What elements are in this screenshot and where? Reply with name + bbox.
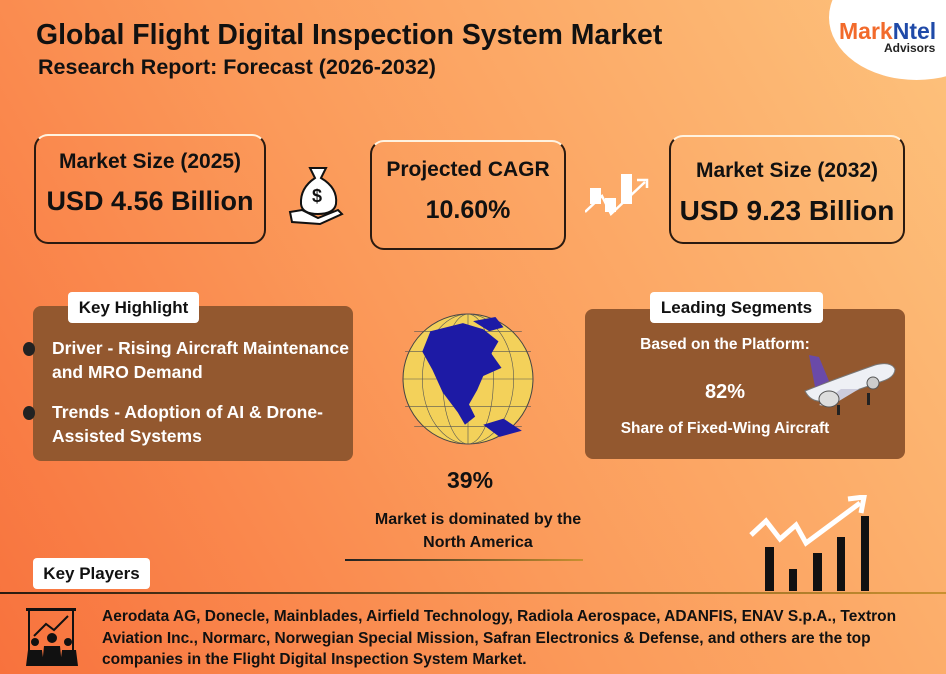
logo xyxy=(829,0,946,80)
icon: growth chart xyxy=(585,174,648,216)
logo: Advisors xyxy=(884,41,935,55)
panel: leading segments xyxy=(585,309,905,459)
box: market size 2032: USD 9.23 Billion xyxy=(680,195,894,226)
icon: bar chart arrow xyxy=(749,495,869,591)
text key players xyxy=(102,608,896,668)
bullet trends xyxy=(23,406,35,420)
label key players xyxy=(33,558,150,589)
icon: presentation people xyxy=(26,608,78,666)
panel: key highlight: Trends - Adoption of AI & Drone- xyxy=(52,402,323,422)
bullet driver xyxy=(23,342,35,356)
panel: key highlight xyxy=(33,306,353,461)
text key players: Aerodata AG, Donecle, Mainblades, Airfield Technology, Radiola Aerospace, ADANFIS, ENAV S.p.A., Textron xyxy=(102,608,896,625)
panel: key highlight: Driver - Rising Aircraft Maintenance xyxy=(52,338,349,358)
panel: leading segments: Based on the Platform: xyxy=(640,336,810,353)
subtitle: Research Report: Forecast (2026-2032) xyxy=(38,55,436,79)
box: CAGR xyxy=(370,140,566,250)
title: Global Flight Digital Inspection System Market xyxy=(36,19,662,51)
box: market size 2025: Market Size (2025) xyxy=(59,150,241,173)
text key players: Aviation Inc., Normarc, Norwegian Special Mission, Safran Electronics & Defense, and others are the top xyxy=(102,630,871,646)
box: market size 2032 xyxy=(669,135,905,244)
globe xyxy=(402,314,534,444)
text dominated xyxy=(375,511,581,551)
label key highlight xyxy=(68,292,199,323)
icon: money bag xyxy=(288,167,344,225)
logo: MarkNtel xyxy=(839,18,936,44)
stat 82%: 82% xyxy=(705,381,745,403)
box: CAGR: Projected CAGR xyxy=(386,158,550,181)
label leading segments xyxy=(650,292,823,323)
box: CAGR: 10.60% xyxy=(426,196,510,224)
panel: key highlight: and MRO Demand xyxy=(52,362,203,382)
icon: money bag: $ xyxy=(312,186,322,206)
panel: leading segments: Share of Fixed-Wing Aircraft xyxy=(621,420,829,437)
icon: airplane xyxy=(804,355,896,415)
label leading segments: Leading Segments xyxy=(661,298,812,317)
panel: key highlight: Assisted Systems xyxy=(52,426,202,446)
box: market size 2025 xyxy=(34,134,266,244)
stat 39%: 39% xyxy=(447,467,493,493)
text dominated: North America xyxy=(423,534,533,551)
box: market size 2032: Market Size (2032) xyxy=(696,159,878,182)
text dominated: Market is dominated by the xyxy=(375,511,581,528)
label key players: Key Players xyxy=(43,564,140,583)
box: market size 2025: USD 4.56 Billion xyxy=(46,186,254,216)
label key highlight: Key Highlight xyxy=(79,298,188,317)
text key players: companies in the Flight Digital Inspection System Market. xyxy=(102,651,527,668)
